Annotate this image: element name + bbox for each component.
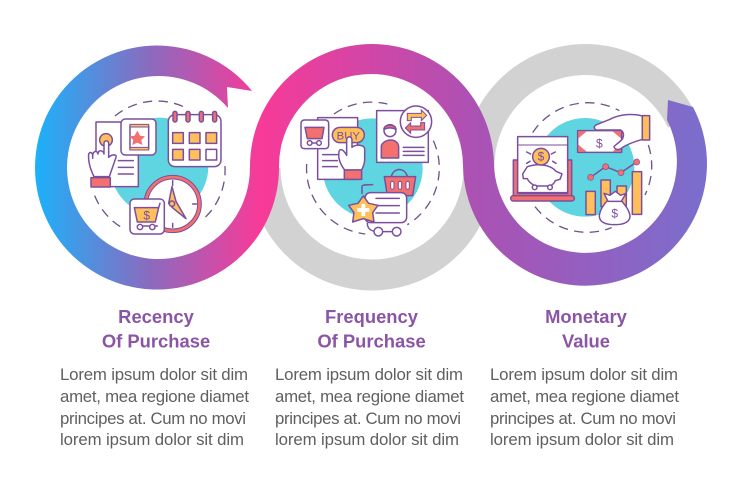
- text block: recency: Lorem ipsum dolor sit dim: [60, 365, 248, 384]
- heading: frequency of purchase: Of Purchase: [317, 330, 426, 352]
- text block: frequency: Lorem ipsum dolor sit dim: [275, 365, 463, 384]
- gradient ribbon with arrow tip: [35, 44, 707, 290]
- text block: recency: amet, mea regione diamet: [60, 387, 249, 406]
- cart card: $: [143, 208, 150, 222]
- text block: monetary: principes at. Cum no movi: [490, 409, 676, 428]
- basket: [384, 169, 416, 196]
- hand: [339, 137, 365, 179]
- text block: recency: lorem ipsum dolor sit dim: [60, 430, 244, 449]
- text block: recency: principes at. Cum no movi: [60, 409, 246, 428]
- heading: recency of purchase: Of Purchase: [102, 330, 210, 352]
- line chart: [588, 159, 640, 180]
- document: [96, 122, 138, 187]
- laptop: [511, 137, 574, 201]
- money bag: $: [611, 206, 618, 220]
- piggy bank: $: [538, 150, 545, 164]
- clock: [144, 175, 201, 233]
- heading: monetary value: Monetary: [545, 306, 628, 327]
- heading: recency of purchase: Recency: [118, 306, 195, 327]
- text block: frequency: amet, mea regione diamet: [275, 387, 464, 406]
- banknote: [578, 131, 622, 152]
- repeat badge: [400, 106, 432, 137]
- gray ribbon: [265, 60, 682, 275]
- shopping cart: [362, 185, 407, 236]
- BUY button: BUY: [337, 131, 360, 143]
- text block: frequency: lorem ipsum dolor sit dim: [275, 430, 459, 449]
- bar chart: [586, 172, 642, 215]
- money bag: [599, 191, 630, 225]
- text block: frequency: principes at. Cum no movi: [275, 409, 461, 428]
- cart card: [301, 120, 329, 149]
- star card: [121, 119, 156, 155]
- text block: monetary: Lorem ipsum dolor sit dim: [490, 365, 678, 384]
- icon: recency of purchase: [89, 101, 225, 234]
- document: [318, 118, 358, 179]
- calendar: [168, 111, 221, 167]
- hand with cuff: [594, 114, 650, 150]
- text block: monetary: lorem ipsum dolor sit dim: [490, 430, 674, 449]
- icon: monetary value: [511, 103, 652, 232]
- heading: frequency of purchase: Frequency: [325, 306, 419, 327]
- banknote: $: [596, 136, 603, 150]
- heading: monetary value: Value: [562, 330, 610, 352]
- text block: monetary: amet, mea regione diamet: [490, 387, 679, 406]
- profile document: [377, 111, 428, 162]
- icon: frequency of purchase: [301, 102, 439, 236]
- piggy bank: [523, 148, 562, 190]
- plus star: [349, 196, 378, 222]
- hand: [89, 134, 116, 187]
